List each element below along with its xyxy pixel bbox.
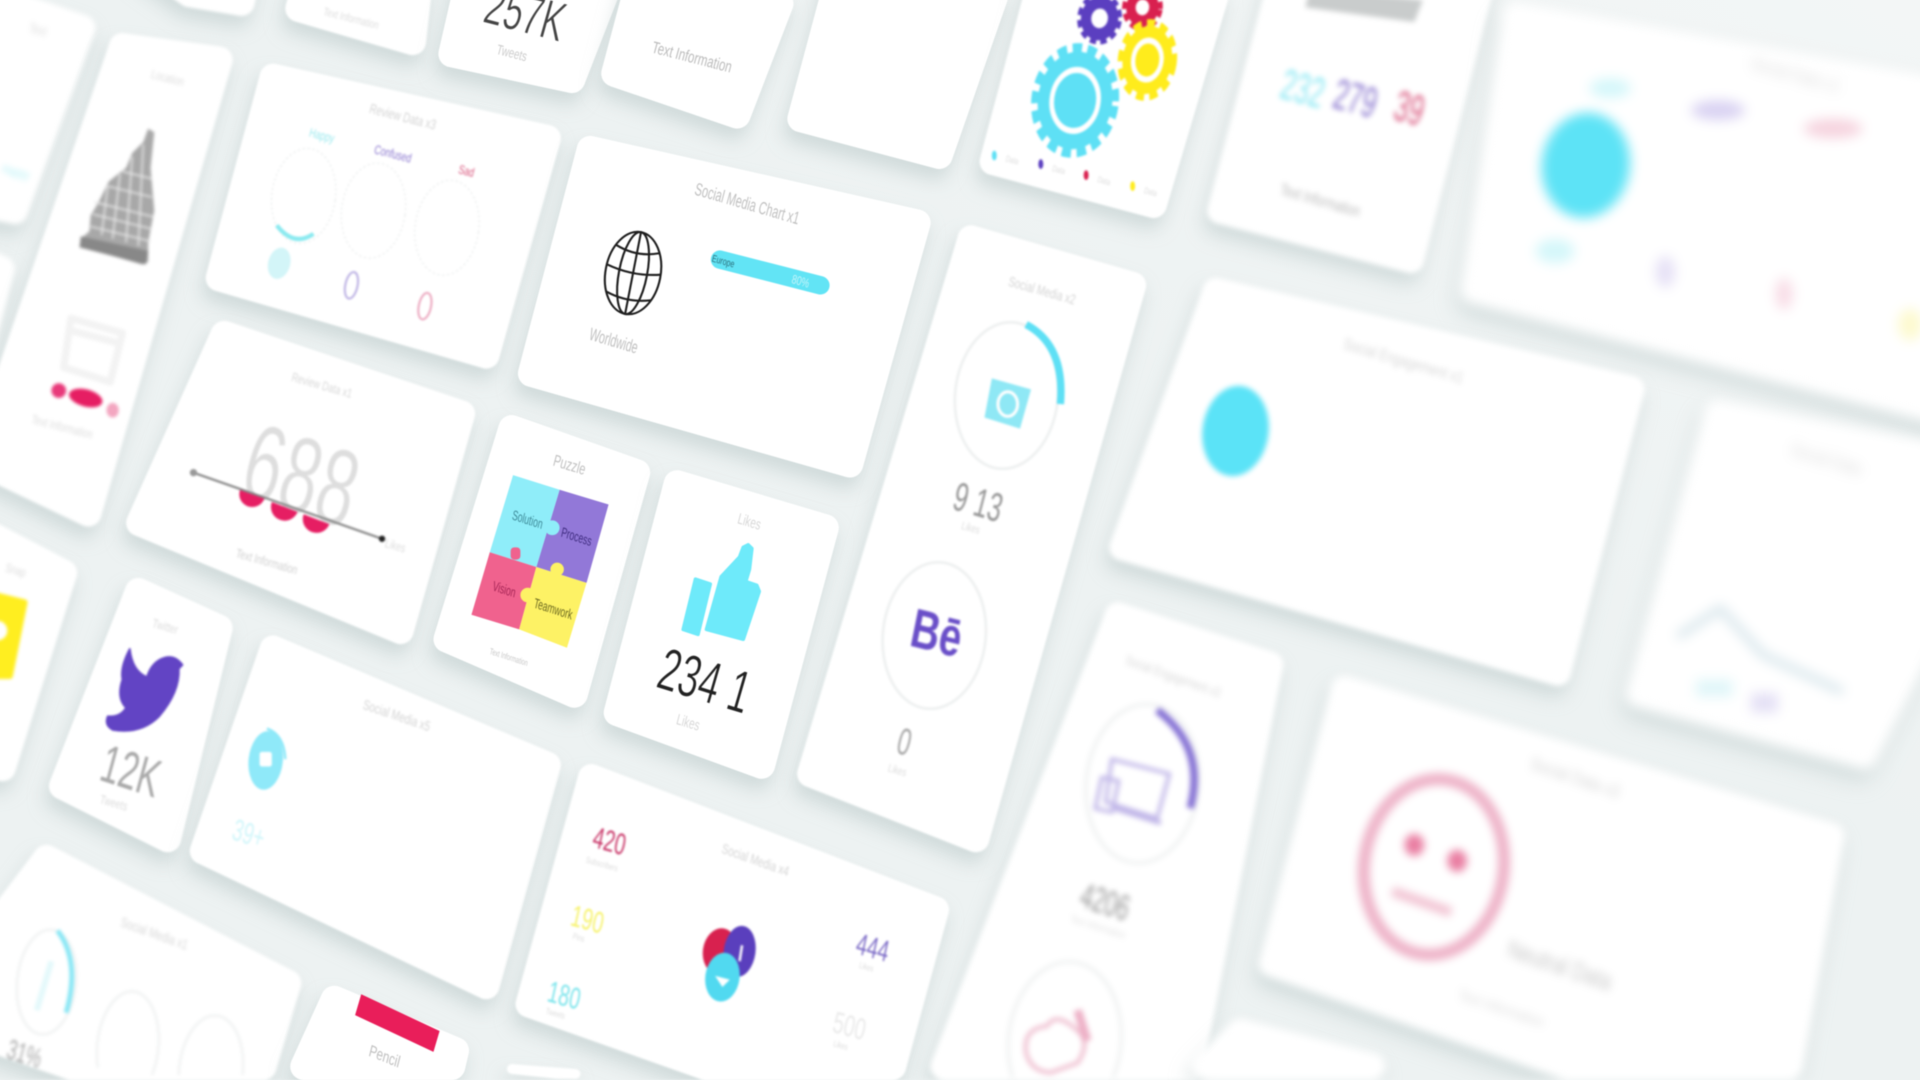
pink chart blobs [51,383,119,418]
panel: far left strip card [0,245,1,490]
cyan count blob [264,245,294,281]
label likes: Likes [383,537,407,556]
label: Text Information [1069,913,1127,943]
panel: social media x5 card [203,649,547,986]
panel: top right emoji card [1474,16,1920,416]
icon: neutral face [1352,770,1515,964]
stats: 190 [568,900,607,941]
label: Likes [960,520,981,537]
stats: Likes [832,1038,849,1052]
ring [1078,699,1207,869]
label: Text Information [650,39,734,77]
bar labels: 80% [790,273,811,291]
label: Likes [886,762,908,780]
panel: bottom left card [0,858,288,1075]
icon: gears [1028,0,1179,158]
legend: Data [1096,174,1112,188]
option labels [1536,78,1920,340]
number 688: 688 [231,401,371,553]
legend: Data [1051,163,1067,177]
face sad [409,176,485,279]
numbers: 232 [1276,60,1330,118]
label: Snap [4,561,27,580]
title: Social Data x3 [1528,753,1622,803]
emoji blob [1535,107,1637,224]
far left card text: Text [27,20,49,40]
stats: 444 [853,928,892,969]
label likes: Likes [675,710,702,734]
percent: 31% [4,1033,45,1074]
icon: devices [1095,759,1169,823]
slider line [193,473,382,539]
stats: Pins [572,931,586,944]
face happy [266,144,342,248]
panel: top card with small label [299,0,419,42]
icon: skyscraper [80,129,154,264]
face labels: Sad [457,163,476,180]
label: Text Information [322,6,380,32]
legend [992,151,1159,199]
far left card text: Happy [0,161,32,183]
face labels: Confused [373,143,413,166]
behance ring [875,557,993,714]
label tweets: Tweets [495,41,529,65]
icon: thumbs up [683,545,759,639]
panel: right chart card [1640,414,1920,756]
text blocks [1456,935,1615,1032]
numbers [1276,60,1429,136]
panel: top small card [147,0,247,2]
panel: bottom small card [512,1069,576,1074]
counts [343,271,434,321]
face labels: Happy [308,126,336,146]
panel: left yellow card [0,514,64,768]
rings [12,927,243,1075]
puzzle graphic: Vision [491,580,517,601]
puzzle graphic: Teamwork [532,597,574,623]
stats: Likes [858,960,875,974]
panel: likes card [617,484,825,765]
label worldwide: Worldwide [587,325,640,358]
ring 2 [1008,962,1121,1078]
gray image bar [1305,0,1423,22]
puzzle graphic [471,475,609,648]
caption: Text Information [489,646,529,668]
title: Social Data [1788,439,1865,480]
puzzle graphic: Process [560,526,593,550]
label: Text Information [30,413,94,442]
number: 39+ [229,813,268,856]
instagram ring [948,317,1065,474]
stats: Tweets [545,1006,566,1021]
title: Social Media x2 [1007,273,1078,308]
bar labels [711,252,811,291]
panel: far left top card [0,0,82,211]
panel: review data faces card [219,77,547,355]
panel: numbers card [1221,0,1484,260]
panel: pencil card [304,994,456,1072]
panel: social media x4 card [529,778,936,1067]
panel: big face card [1272,689,1831,1067]
title: Social Data x1 [1748,53,1843,97]
stats: 420 [590,821,629,862]
title: Social Media x5 [361,696,432,735]
label: Pencil [367,1042,402,1072]
title: Social Media x4 [720,840,791,880]
label text information: Text Information [234,547,299,578]
face labels [308,126,476,180]
ring icon [246,729,286,791]
red pencil bar [355,994,440,1052]
icon: social circles [700,924,759,1004]
panel: building card [0,47,219,513]
stats [545,821,892,1052]
label: Tweets [98,793,129,814]
panel: text information card [615,0,780,115]
title: Puzzle [552,451,588,478]
title: Social Engagement x3 [1124,652,1222,701]
numbers: 279 [1329,70,1382,128]
faint graphic [64,318,122,382]
bar europe [720,260,820,285]
count: 4206 [1076,876,1134,929]
title: Social Engagement x1 [1341,336,1465,388]
panel: blank card [801,0,994,156]
panel: twitter card [62,591,219,839]
title: Review Data x3 [368,100,438,133]
panel: 688 likes card [140,334,462,631]
text blocks: Text Information [1456,987,1546,1032]
stats: 180 [545,976,584,1017]
number 2341: 234 1 [651,635,759,727]
legend: Data [1004,153,1020,167]
title: Location [149,68,185,90]
icon: yellow snap [0,590,24,676]
count: 0 [893,719,916,764]
icon: behance: Bē [906,598,967,670]
pink half discs [239,490,329,533]
title: Review Data x1 [290,371,354,401]
panel: gears card [992,0,1215,204]
numbers: 39 [1389,81,1429,136]
stats: 500 [830,1006,869,1047]
emoji blob [1196,382,1275,480]
icon: instagram [984,378,1031,429]
legend: Data [1143,185,1159,199]
panel: tweets 257K card [452,0,609,80]
title: Social Media x1 [119,914,190,953]
stats: Subscribers [585,855,619,874]
icon: globe [598,227,668,319]
slider handles [190,469,385,542]
bar labels: Europe [711,252,736,270]
label: Text Information [1278,181,1362,222]
far left card text [0,20,49,183]
icon: twitter bird [107,649,182,731]
count: 9 13 [949,474,1007,532]
panel: bottom center card [1206,1032,1371,1067]
panel: center wide card [1123,291,1631,672]
panel: social media x2 card [811,239,1133,839]
panel: device and cloud card [944,616,1270,1078]
icon: cloud [1026,1010,1087,1073]
panel: puzzle card [447,429,637,694]
number 12K: 12K [95,734,167,809]
chart legend [1696,680,1778,713]
panel: social media chart x1 card [531,149,917,464]
title: Social Media Chart x1 [693,180,801,229]
puzzle graphic: Solution [511,509,544,532]
text blocks: Neutral Data [1505,935,1615,996]
title: Likes [736,509,763,533]
face confused [335,159,412,262]
faint line chart [1678,609,1843,692]
title: Twitter [151,617,180,638]
